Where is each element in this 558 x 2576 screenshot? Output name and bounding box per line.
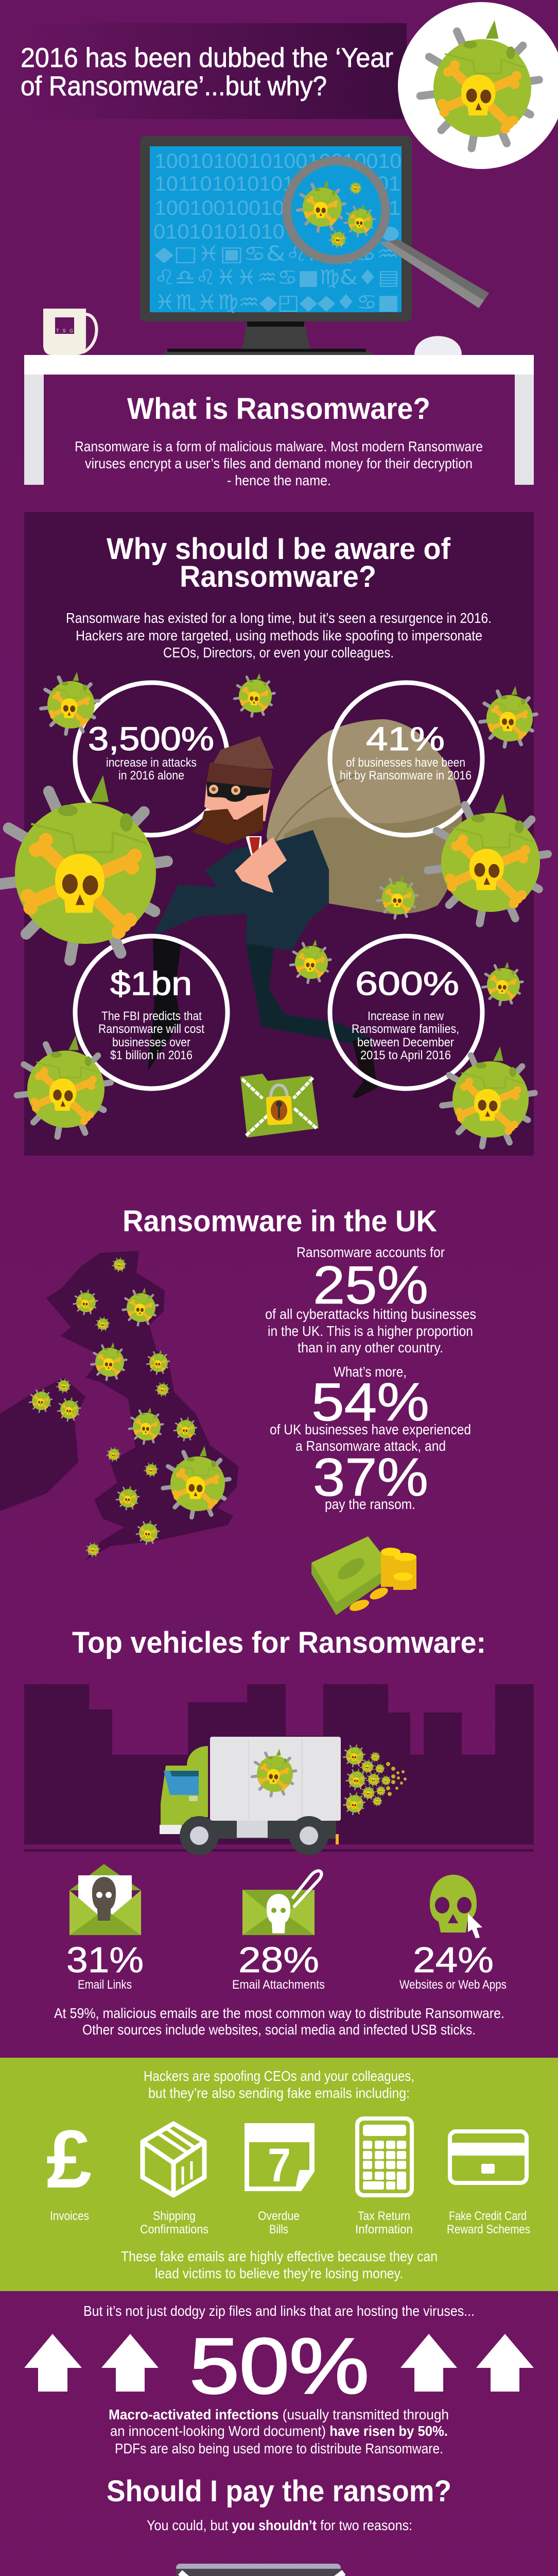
icons: virus exhaust (343, 1743, 407, 1815)
vehicle: email links: 31% (66, 1940, 144, 1980)
stat circle: 600%: Ransomware families, (352, 1022, 459, 1036)
sack (267, 719, 462, 914)
heading: Top vehicles: Top vehicles for Ransomware: (72, 1626, 486, 1659)
item: overdue bills: Overdue (258, 2209, 300, 2223)
item: shipping confirmations: Confirmations (140, 2223, 208, 2236)
title band (10, 23, 407, 119)
heading: Should I pay: Should I pay the ransom? (107, 2475, 451, 2508)
text block: UK statistics: in the UK. This is a higher proportion (268, 1323, 473, 1339)
illustration: thief with sack (148, 719, 462, 1098)
mug: T S G (56, 328, 73, 333)
stat text: 3,500% (88, 720, 214, 783)
heading: why (107, 532, 451, 594)
icons: viruses around the panel (0, 672, 548, 1146)
text: malicious emails (54, 2005, 504, 2038)
icon: money and coins (311, 1536, 416, 1615)
text block: UK statistics: of all cyberattacks hitting businesses (265, 1306, 476, 1322)
text: macro infections (109, 2406, 449, 2456)
vehicle: email links: Email Links (78, 1978, 132, 1992)
stat circle: 600%: Increase in new (368, 1009, 444, 1023)
stat text: 3,500%: 3,500% (88, 720, 214, 757)
vehicle: websites: 24% (413, 1940, 494, 1980)
screen binary and symbols: ♓♏♓♍♒◆◰◆◆♦♋■ (154, 291, 399, 314)
text block: UK statistics: 25% (313, 1256, 428, 1315)
vehicle: websites: Websites or Web Apps (399, 1978, 507, 1992)
title: 2016 has been dubbed the ‘Year (21, 43, 393, 73)
shirt and tie (246, 836, 261, 859)
icon: envelope with paperclip (242, 1871, 322, 1935)
mask (206, 782, 270, 802)
text: resurgence: Hackers are more targeted, using methods like spoofing to impersonate (76, 628, 482, 643)
face (204, 784, 270, 821)
text: ransomware definition: - hence the name. (227, 472, 331, 488)
icon: calculator (355, 2116, 414, 2197)
stat text: 3,500%: increase in attacks (106, 756, 197, 770)
item: shipping confirmations (140, 2124, 208, 2236)
text block: UK statistics: 37% (313, 1448, 428, 1507)
text: two reasons: You could, but you shouldn’t for two reasons: (147, 2517, 412, 2533)
screen binary and symbols: 101101010101010100101 (154, 173, 400, 195)
heading: why: Why should I be aware of (107, 532, 451, 566)
screen binary and symbols: 100101001010010010010 (154, 150, 402, 173)
item: tax return (355, 2116, 414, 2236)
item: shipping confirmations: Shipping (153, 2209, 196, 2223)
text: spoofing intro (144, 2068, 414, 2101)
arrow up (101, 2334, 159, 2392)
item: tax return: Tax Return (358, 2209, 410, 2223)
text: ransomware definition: Ransomware is a form of malicious malware. Most modern Ransomware (75, 438, 483, 454)
mug (43, 309, 97, 355)
item: invoices: Invoices (50, 2209, 89, 2223)
text: fake emails effect: These fake emails are highly effective because they can (121, 2248, 438, 2264)
panel: why should I be aware (0, 512, 548, 1156)
screen binary and symbols: 01010101010 (153, 221, 285, 243)
stat circle: 41% (330, 683, 482, 835)
screen binary and symbols: ◆□♓▣♋&♌♏■♋♒ (154, 242, 399, 266)
item: invoices (46, 2113, 92, 2223)
text: fake emails effect: lead victims to believe they’re losing money. (155, 2265, 403, 2281)
text: spoofing intro: Hackers are spoofing CEOs and your colleagues, (144, 2068, 414, 2084)
text: macro infections: an innocent-looking Word document) have risen by 50%. (110, 2423, 448, 2439)
icon: chained folder with padlock (240, 1074, 319, 1138)
heading: What is Ransomware?: What is Ransomware? (127, 392, 430, 426)
legs (148, 936, 181, 1071)
stat circle: 600%: 2015 to April 2016 (360, 1048, 451, 1062)
text: ransomware definition: viruses encrypt a user’s files and demand money for their decryption (85, 455, 473, 471)
text: ransomware definition (75, 438, 483, 488)
item: overdue bills (245, 2123, 315, 2236)
item: tax return: Information (355, 2223, 413, 2236)
city skyline (24, 1684, 534, 1844)
item: overdue bills: Bills (269, 2223, 288, 2236)
stat circle: $1bn: Ransomware will cost (98, 1022, 204, 1036)
vehicle: websites (399, 1875, 507, 1992)
vehicle: email attachments: Email Attachments (232, 1978, 325, 1992)
monitor (140, 136, 412, 321)
text block: UK statistics: Ransomware accounts for (297, 1244, 445, 1260)
text: resurgence (66, 610, 492, 660)
text: malicious emails: At 59%, malicious emails are the most common way to distribute Ransomware. (54, 2005, 504, 2021)
item: credit card (447, 2131, 530, 2236)
icon: credit card (450, 2131, 527, 2183)
stat circle: $1bn (75, 936, 228, 1089)
icon: virus on truck (252, 1749, 296, 1796)
monitor stand (242, 320, 310, 350)
vehicle: email attachments (232, 1871, 325, 1992)
magnifying glass (287, 161, 489, 308)
icon: pound: £ (46, 2113, 92, 2205)
item: credit card: Fake Credit Card (449, 2209, 527, 2223)
panel: fake emails (0, 2058, 558, 2291)
text: resurgence: CEOs, Directors, or even your colleagues. (163, 645, 394, 660)
text block: UK statistics: of UK businesses have experienced (270, 1421, 471, 1437)
stat circle: 600%: between December (357, 1036, 454, 1049)
desk (24, 355, 534, 485)
text: macro infections: PDFs are also being used more to distribute Ransomware. (115, 2441, 443, 2456)
stat circle: 41%: hit by Ransomware in 2016 (340, 769, 472, 783)
stat circle: 41%: of businesses have been (346, 756, 465, 770)
arrow up (400, 2334, 457, 2392)
map: UK and Ireland with viruses (0, 1251, 238, 1561)
centre monitor (176, 2564, 344, 2576)
icon: envelope with skull letter (69, 1864, 141, 1935)
stat circle: $1bn: $1bn (110, 965, 192, 1002)
hero illustration: computer on desk (24, 136, 534, 485)
stat circle: 600% (330, 936, 482, 1089)
text block: UK statistics: 54% (311, 1372, 429, 1432)
stat circle: 41%: 41% (366, 720, 445, 757)
text block: UK statistics: What’s more, (334, 1364, 407, 1380)
text block: UK statistics: a Ransomware attack, and (295, 1438, 446, 1454)
arrow up (476, 2334, 534, 2392)
stat circle: 600%: 600% (355, 965, 459, 1002)
text block: UK statistics (265, 1244, 476, 1512)
text block: UK statistics: than in any other country. (298, 1340, 443, 1355)
road (24, 1849, 534, 1852)
icon: skull with cursor (430, 1875, 482, 1938)
title: of Ransomware’...but why? (21, 71, 327, 101)
title (21, 43, 393, 101)
text: macro infections: Macro-activated infections (usually transmitted through (109, 2406, 449, 2422)
text: zip files: But it’s not just dodgy zip files and links that are hosting the viruses... (83, 2303, 475, 2319)
text: malicious emails: Other sources include websites, social media and infected USB sticks. (82, 2022, 476, 2038)
screen binary and symbols: ♌♎♌♓♓♒♋■♍&♦▤ (154, 266, 399, 290)
text: resurgence: Ransomware has existed for a long time, but it’s seen a resurgence in 2016. (66, 610, 492, 626)
hat (210, 736, 274, 769)
heading: why: Ransomware? (180, 560, 376, 594)
stat circle: $1bn: $1 billion in 2016 (110, 1048, 193, 1062)
stat ring: 3,500% (75, 683, 228, 835)
illustration: distressed worker at desk (38, 2564, 520, 2576)
statistic: 50%: 50% (189, 2322, 369, 2410)
keyboard (164, 349, 372, 355)
screen binary and symbols: ♦♒♋♋● (301, 222, 400, 243)
illustration: truck (160, 1737, 341, 1855)
screen binary and symbols: 100100100101001010011 (154, 197, 400, 219)
suit (153, 830, 329, 951)
icon: virus in white circle (398, 2, 558, 169)
item: credit card: Reward Schemes (447, 2223, 530, 2236)
mouse (414, 336, 462, 355)
screen binary and symbols (153, 150, 402, 314)
stat text: 3,500%: in 2016 alone (118, 769, 184, 783)
icon: calendar (245, 2123, 315, 2192)
stat circle: $1bn: The FBI predicts that (101, 1009, 202, 1023)
text: spoofing intro: but they’re also sending fake emails including: (148, 2085, 410, 2101)
icon: calendar: 7 (268, 2139, 291, 2192)
icon: package (143, 2124, 204, 2195)
vehicle: email attachments: 28% (238, 1940, 319, 1980)
text block: UK statistics: pay the ransom. (325, 1496, 415, 1512)
beard (192, 805, 263, 844)
hands (235, 837, 287, 893)
vehicle: email links (66, 1864, 144, 1992)
stat circle: $1bn: businesses over (112, 1036, 190, 1049)
arrow up (24, 2334, 82, 2392)
text: fake emails effect (121, 2248, 438, 2281)
heading: Ransomware in the UK: Ransomware in the UK (123, 1205, 437, 1238)
